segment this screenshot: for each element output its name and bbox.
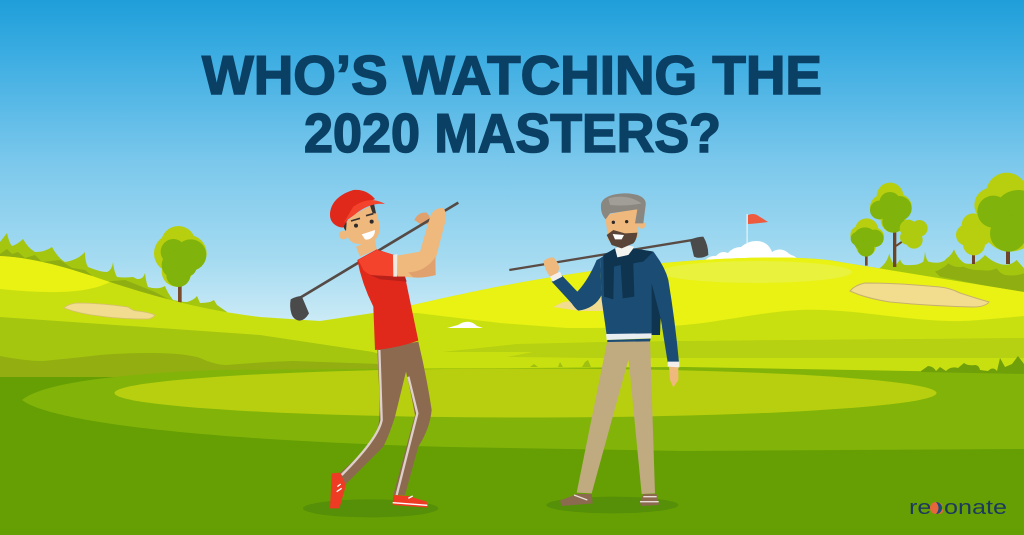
title — [202, 44, 822, 164]
sky background — [0, 0, 1024, 325]
eyes and mouth — [351, 214, 375, 240]
darker band left — [0, 317, 415, 385]
golf club — [509, 237, 708, 270]
neck — [356, 239, 377, 257]
raised hand and cuff — [543, 257, 562, 282]
left tree — [154, 226, 207, 302]
neck and collar — [615, 245, 634, 258]
tree: small left — [850, 218, 884, 266]
ear — [339, 231, 348, 239]
tree: large right — [974, 173, 1024, 264]
head — [601, 193, 646, 248]
bunker left — [64, 303, 155, 319]
cloud behind green — [704, 241, 801, 261]
outer fairway — [22, 367, 1024, 451]
cap brim — [344, 200, 385, 222]
tree: light right — [956, 213, 992, 264]
yellow patch left — [0, 256, 110, 292]
sweater — [552, 248, 679, 362]
bunker right — [850, 283, 989, 307]
lowered hand and cuff — [668, 362, 679, 387]
golfer head with red cap — [330, 190, 385, 245]
fairway — [0, 356, 1024, 535]
back hand — [414, 213, 431, 225]
shoes — [560, 494, 659, 506]
small white cloud — [447, 322, 483, 328]
arm shading — [408, 257, 436, 278]
tied sweater — [603, 248, 653, 299]
sprouts right — [921, 356, 1024, 374]
logo wordmark: resonate — [909, 497, 1007, 519]
bunker middle — [553, 297, 612, 311]
yellow hill right — [373, 258, 1024, 328]
right treeline bushes — [873, 249, 1024, 300]
cap — [330, 190, 375, 228]
shaded stripe right — [442, 338, 1024, 358]
far sprouts — [530, 360, 591, 367]
base lime hill — [0, 256, 1024, 385]
olive band left — [0, 353, 400, 385]
golfer swinging in red — [290, 203, 458, 517]
title line 1: WHO’S WATCHING THE — [202, 44, 822, 106]
logo swirl — [930, 502, 942, 514]
face — [344, 204, 380, 245]
rolling hills — [0, 256, 1024, 385]
flag and pin — [746, 214, 768, 266]
ground shadow — [303, 499, 438, 517]
dark foreground grass — [0, 377, 1024, 535]
tree: middle tall — [870, 183, 928, 267]
front arm — [395, 208, 446, 278]
shirt — [357, 249, 418, 350]
pants — [577, 339, 655, 494]
older golfer in navy — [509, 193, 708, 513]
resonate logo — [909, 497, 1007, 519]
inner fairway — [114, 368, 936, 418]
shoes — [330, 473, 428, 508]
ground shadow — [546, 497, 678, 513]
hair — [342, 204, 376, 231]
golf club — [290, 203, 458, 321]
title line 2: 2020 MASTERS? — [304, 102, 721, 164]
right trees and bushes — [850, 173, 1024, 300]
left treeline bushes — [0, 233, 240, 330]
putting green highlight — [660, 261, 852, 283]
pants — [339, 342, 432, 495]
